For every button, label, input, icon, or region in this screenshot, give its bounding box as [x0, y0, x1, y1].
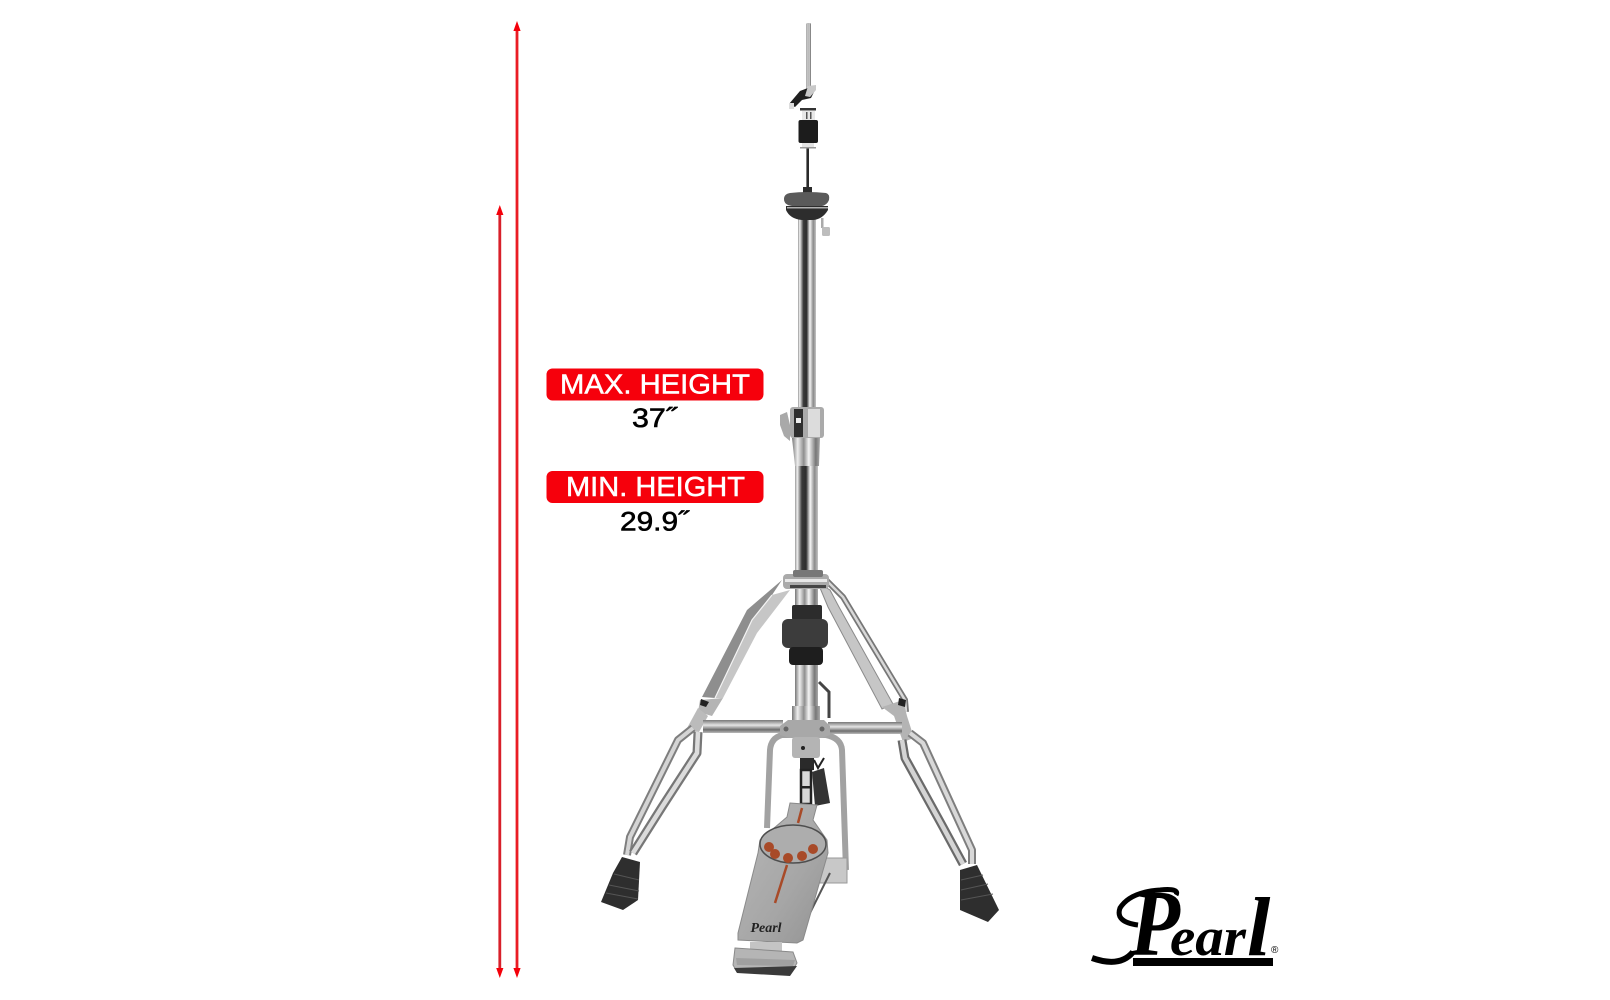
value: max height: 37˝ [632, 403, 678, 433]
upper height tube [798, 210, 816, 415]
pedal base and link [800, 858, 847, 933]
lower height tube [795, 460, 818, 585]
right leg lower [902, 733, 972, 864]
cymbal seat [784, 187, 830, 236]
left leg upper [686, 580, 790, 732]
logo: Pearl: P [1129, 872, 1181, 976]
logo: Pearl [1092, 872, 1279, 976]
lower tube [795, 589, 818, 714]
tripod collar [783, 570, 829, 589]
arrow: minimum height dimension [496, 205, 503, 978]
right leg upper [818, 577, 914, 742]
logo: Pearl: ear [1170, 907, 1247, 967]
top rod and clutch [789, 23, 818, 195]
center hub [780, 706, 830, 758]
footboard: Pearl [750, 921, 782, 936]
right rubber foot [960, 865, 999, 922]
badge: max height label: MAX. HEIGHT [560, 368, 750, 400]
linkage strap [819, 682, 829, 718]
badge: min height label: MIN. HEIGHT [566, 471, 745, 502]
value: min height: 29.9˝ [620, 506, 690, 536]
pedal chain and spring [800, 758, 830, 806]
logo: Pearl: l [1247, 881, 1271, 974]
pedal frame arch [767, 735, 846, 870]
hi-hat stand [601, 23, 999, 976]
left leg lower [627, 728, 698, 855]
left rubber foot [601, 857, 640, 910]
locking nut [782, 605, 828, 665]
arrow: maximum height dimension [513, 21, 521, 978]
cross bars [703, 720, 902, 734]
logo: Pearl: ® [1271, 945, 1279, 956]
heel plate [733, 942, 797, 976]
height lock [780, 407, 824, 466]
footboard [738, 803, 828, 943]
